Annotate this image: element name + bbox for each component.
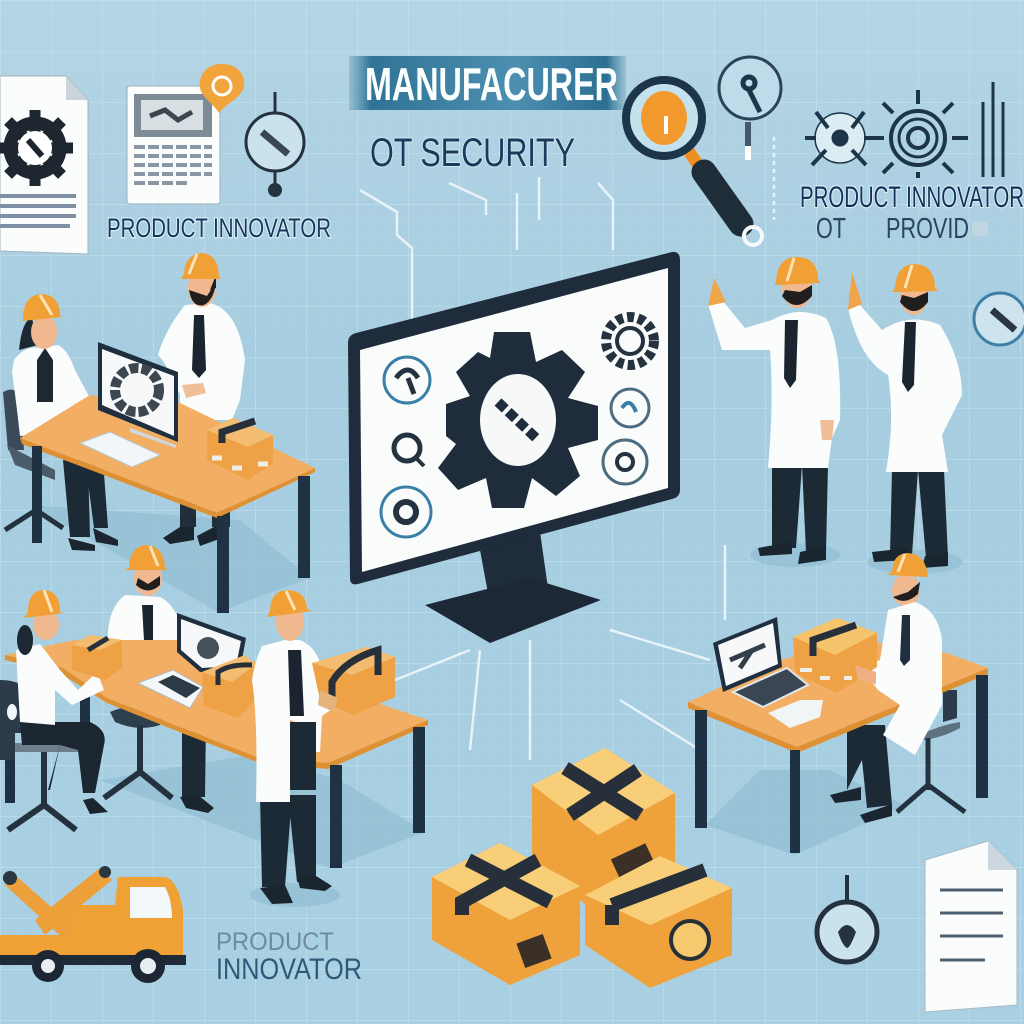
parcels stack, bottom centre bbox=[432, 748, 732, 988]
screen icons left bbox=[381, 357, 431, 537]
standing man bbox=[158, 253, 245, 546]
right parcel bbox=[585, 856, 732, 988]
engineer two bbox=[848, 264, 962, 568]
desk right bbox=[688, 640, 988, 853]
monitor screen bbox=[348, 252, 680, 584]
icon: small lens far right bbox=[974, 293, 1024, 345]
parcels lower desk bbox=[72, 635, 255, 718]
icon: magnifying glass bbox=[626, 80, 762, 245]
title: manufacturer: MANUFACURER bbox=[365, 58, 618, 110]
scene: right workstation bbox=[688, 553, 988, 853]
label: product innovator left: PRODUCT INNOVATOR bbox=[107, 213, 331, 243]
desk bbox=[20, 395, 315, 613]
scene: two engineers standing right bbox=[708, 257, 962, 568]
gear icon on screen bbox=[438, 332, 598, 508]
icon: gear on document bbox=[0, 110, 73, 186]
chair right bbox=[897, 690, 965, 812]
office chair bbox=[3, 390, 63, 530]
icon: document with gear, top left bbox=[0, 76, 88, 254]
desktop monitor bbox=[98, 342, 178, 448]
office chair lower bbox=[0, 680, 87, 830]
seated man right bbox=[830, 553, 928, 823]
icon: gauge probe top left bbox=[246, 92, 304, 197]
hand on parcel bbox=[855, 665, 876, 684]
engineer one bbox=[708, 257, 840, 564]
lab coat over desk bbox=[858, 602, 942, 755]
title: manufacturer bbox=[349, 56, 626, 110]
laptop lower bbox=[138, 613, 246, 708]
monitor stand bbox=[425, 532, 601, 643]
laptop right bbox=[713, 617, 823, 728]
label: OT provider: OT bbox=[816, 213, 846, 245]
icon: forklift truck bbox=[0, 866, 186, 983]
label: product innovator bottom: PRODUCT bbox=[216, 928, 334, 956]
man at laptop bbox=[108, 545, 214, 813]
icon: orange location pin bbox=[200, 64, 244, 113]
seated woman lower bbox=[16, 590, 108, 814]
seated woman bbox=[12, 294, 118, 551]
scene: top left workstation bbox=[3, 253, 315, 613]
parcel on desk bbox=[207, 418, 273, 480]
screen icons right bbox=[603, 317, 654, 484]
parcel right desk bbox=[793, 618, 877, 693]
subtitle: OT security: OT SECURITY bbox=[370, 131, 575, 175]
label: product innovator bottom: INNOVATOR bbox=[216, 953, 362, 986]
standing man holding parcel bbox=[252, 590, 395, 904]
icon: report sheet bbox=[127, 86, 220, 204]
label: product innovator bottom bbox=[216, 928, 362, 986]
icon: document bottom right bbox=[925, 841, 1017, 1012]
top parcel bbox=[532, 748, 675, 915]
icon cluster: security targets, top right bbox=[805, 82, 1003, 178]
scene: lower left workstation bbox=[0, 545, 428, 904]
label: OT provider bbox=[816, 213, 988, 245]
office stool bbox=[104, 706, 172, 798]
icon: gauge bottom right bbox=[817, 875, 877, 962]
left parcel bbox=[432, 843, 580, 985]
desk lower bbox=[5, 640, 428, 868]
central monitor bbox=[348, 252, 680, 643]
label: OT provider: PROVID bbox=[886, 213, 969, 245]
keyboard bbox=[80, 432, 160, 467]
icon: circular lens top bbox=[719, 57, 781, 160]
